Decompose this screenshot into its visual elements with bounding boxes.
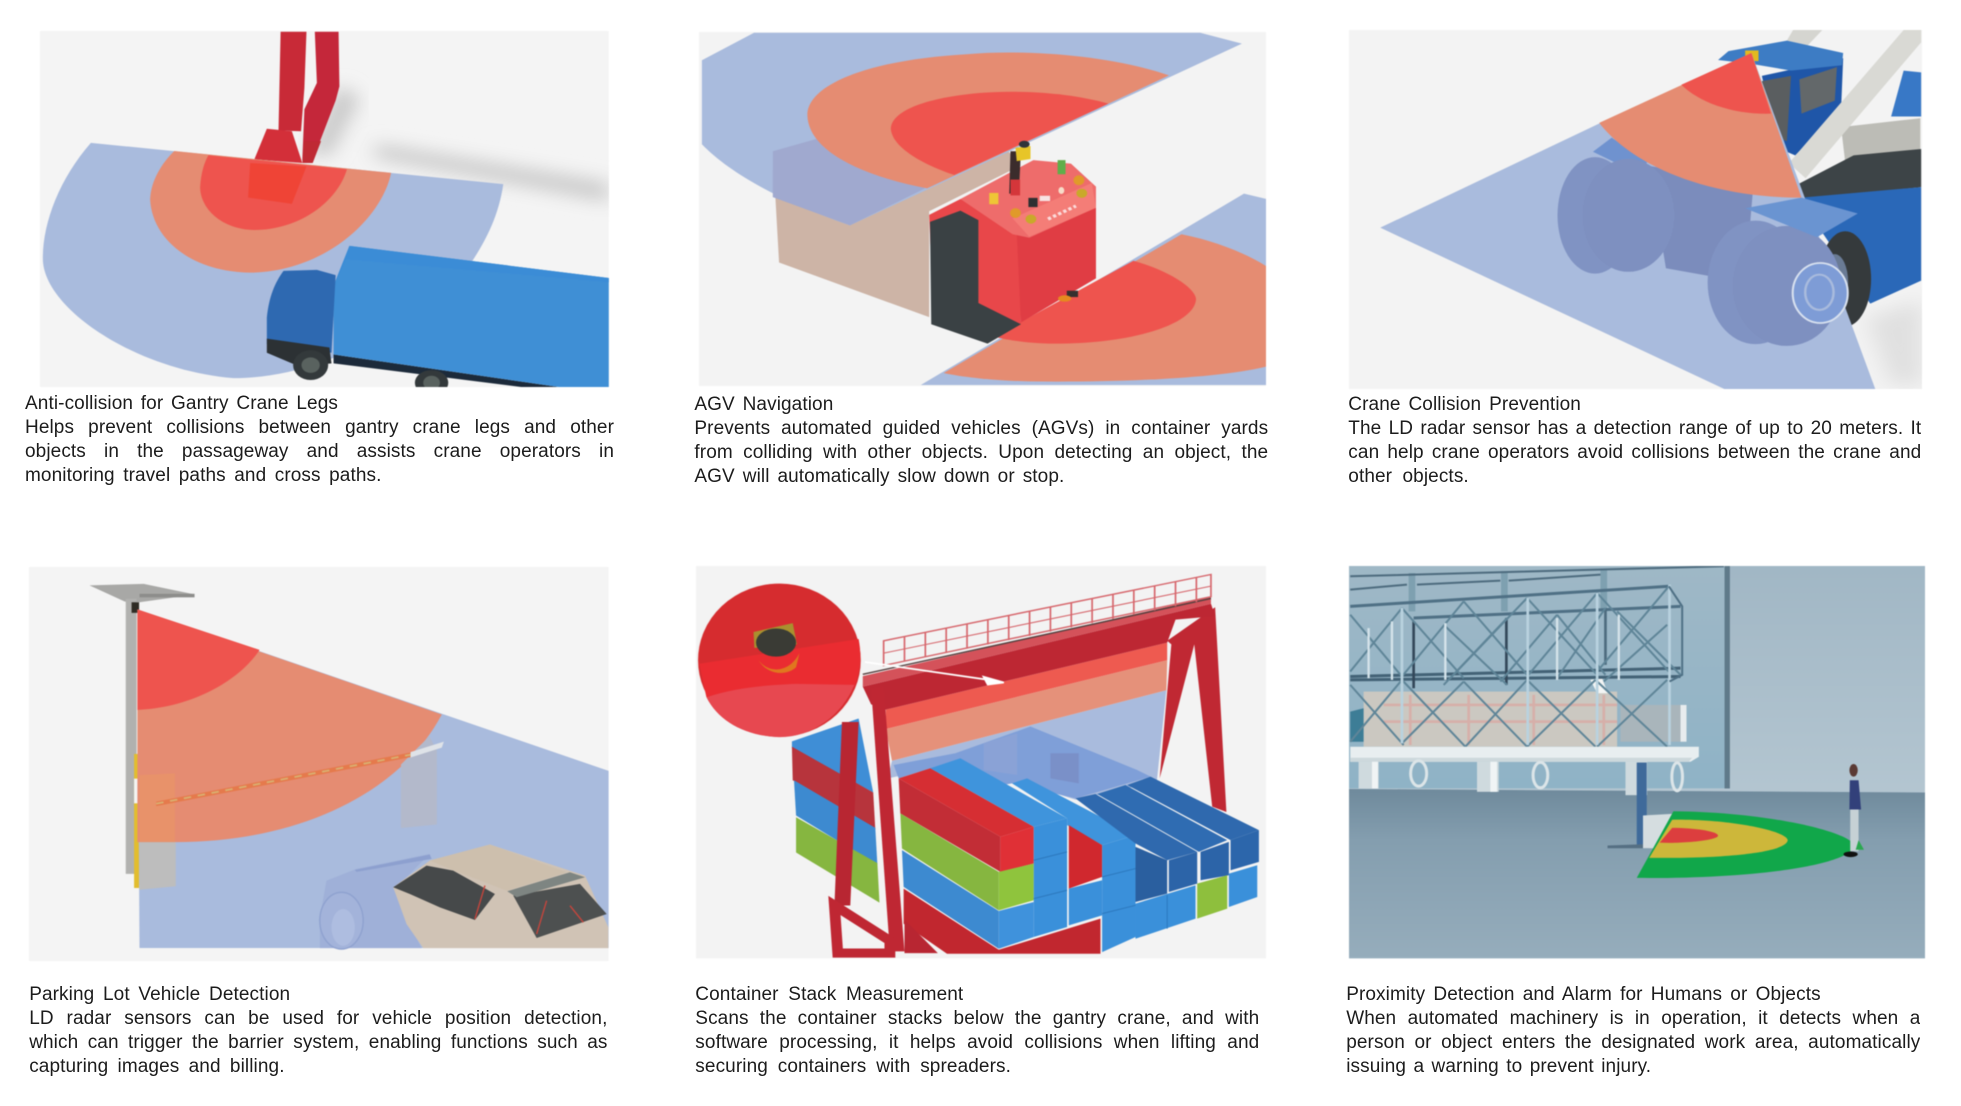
caption: container stack measurement: Container Stack Measurement bbox=[695, 984, 963, 1005]
detection zone: blue bbox=[138, 609, 609, 948]
caption: crane collision prevention bbox=[1348, 394, 1921, 487]
detection zone: green bbox=[1636, 812, 1854, 878]
illustration: gantry crane over containers bbox=[696, 566, 1266, 958]
forklift machine bbox=[1607, 763, 1674, 849]
AGV body bbox=[929, 141, 1096, 344]
panel: proximity detection and alarm bbox=[1346, 565, 1926, 1077]
container stacks bbox=[893, 727, 1259, 954]
detection zone: orange bbox=[138, 609, 442, 842]
gantry beam and railing bbox=[862, 575, 1215, 710]
caption: AGV navigation: from colliding with other objects. Upon detecting an object, the bbox=[694, 442, 1268, 463]
detection zone: blue bbox=[43, 143, 503, 378]
caption: container stack measurement: securing containers with spreaders. bbox=[695, 1056, 1011, 1077]
detection zone: yellow bbox=[1649, 820, 1787, 858]
caption: proximity detection and alarm: person or object enters the designated work area, automatically bbox=[1346, 1032, 1920, 1053]
detection zone: red bbox=[1659, 828, 1718, 843]
illustration: AGV with radar zones bbox=[700, 32, 1267, 386]
caption: anti-collision for gantry crane legs: objects in the passageway and assists crane operators in bbox=[25, 441, 614, 462]
right gantry legs bbox=[1159, 608, 1226, 812]
upper detection zone: orange bbox=[807, 53, 1169, 189]
truss lines bbox=[1350, 585, 1682, 747]
detection zone: blue bbox=[1380, 53, 1875, 389]
arrow bbox=[865, 662, 1003, 685]
detection zone: orange bbox=[150, 151, 391, 273]
upper detection zone: blue bbox=[702, 33, 1242, 226]
illustration: reach stacker with radar zones bbox=[1350, 30, 1922, 390]
lower detection zone bbox=[921, 194, 1266, 385]
truck bbox=[267, 246, 609, 395]
panel: anti-collision for gantry crane legs bbox=[25, 30, 614, 486]
panel: crane collision prevention bbox=[1348, 30, 1922, 487]
panel: container stack measurement bbox=[695, 566, 1266, 1077]
caption: parking lot vehicle detection: capturing images and billing. bbox=[29, 1056, 285, 1077]
illustration: pole, barrier and car bbox=[30, 568, 610, 960]
caption: crane collision prevention: The LD radar sensor has a detection range of up to 20 meters. It bbox=[1348, 418, 1921, 439]
platform bbox=[1350, 747, 1699, 762]
caption: container stack measurement: Scans the container stacks below the gantry crane, and with bbox=[695, 1008, 1259, 1029]
caption: anti-collision for gantry crane legs: monitoring travel paths and cross paths. bbox=[25, 465, 382, 486]
detection zone: orange bbox=[1599, 53, 1801, 198]
illustration: crane leg and truck bbox=[40, 30, 610, 388]
barrier posts and arm bbox=[140, 736, 444, 890]
pole with canopy bbox=[90, 584, 195, 888]
magnified sensor circle bbox=[697, 584, 861, 738]
panel: AGV navigation bbox=[694, 32, 1268, 487]
caption: crane collision prevention: other objects. bbox=[1348, 466, 1469, 487]
caption: parking lot vehicle detection: which can trigger the barrier system, enabling functions such as bbox=[29, 1032, 607, 1053]
caption: parking lot vehicle detection: LD radar sensors can be used for vehicle position detection, bbox=[29, 1008, 607, 1029]
detection zone: red bbox=[200, 155, 347, 230]
caption: anti-collision for gantry crane legs: Anti-collision for Gantry Crane Legs bbox=[25, 393, 338, 414]
illustration: factory hall with detection zones bbox=[1348, 565, 1926, 959]
vehicle bbox=[1718, 30, 1921, 326]
upper detection zone: red bbox=[891, 92, 1108, 175]
person bbox=[1843, 764, 1864, 858]
truss, cargo and platform bbox=[1350, 565, 1730, 796]
detection zone: red bbox=[1681, 53, 1771, 114]
radar curtain bbox=[885, 643, 1167, 800]
left gantry legs bbox=[834, 687, 938, 953]
caption: crane collision prevention: Crane Collision Prevention bbox=[1348, 394, 1581, 415]
caption: container stack measurement: software processing, it helps avoid collisions when lifting and bbox=[695, 1032, 1259, 1053]
caption: AGV navigation: AGV will automatically slow down or stop. bbox=[694, 466, 1064, 487]
caption: crane collision prevention: can help crane operators avoid collisions between the crane and bbox=[1348, 442, 1921, 463]
caption: AGV navigation: AGV Navigation bbox=[694, 394, 833, 415]
beige load box bbox=[773, 134, 1021, 318]
cargo bbox=[1363, 692, 1617, 747]
vehicle seen through zone bbox=[1557, 138, 1857, 346]
panel: parking lot vehicle detection bbox=[29, 568, 610, 1077]
car bbox=[320, 845, 609, 949]
caption: anti-collision for gantry crane legs: Helps prevent collisions between gantry crane legs and other bbox=[25, 417, 614, 438]
caption: proximity detection and alarm: When automated machinery is in operation, it detects when a bbox=[1346, 1008, 1920, 1029]
caption: AGV navigation: Prevents automated guided vehicles (AGVs) in container yards bbox=[694, 418, 1268, 439]
detection zone: red bbox=[138, 609, 260, 710]
caption: container stack measurement bbox=[695, 984, 1259, 1077]
caption: proximity detection and alarm: issuing a warning to prevent injury. bbox=[1346, 1056, 1651, 1077]
caption: parking lot vehicle detection bbox=[29, 984, 607, 1077]
caption: anti-collision for gantry crane legs bbox=[25, 393, 614, 486]
caption: proximity detection and alarm: Proximity Detection and Alarm for Humans or Objects bbox=[1346, 984, 1821, 1005]
caption: parking lot vehicle detection: Parking Lot Vehicle Detection bbox=[29, 984, 290, 1005]
caption: AGV navigation bbox=[694, 394, 1268, 487]
back container stack bbox=[792, 719, 879, 903]
caption: proximity detection and alarm bbox=[1346, 984, 1920, 1077]
